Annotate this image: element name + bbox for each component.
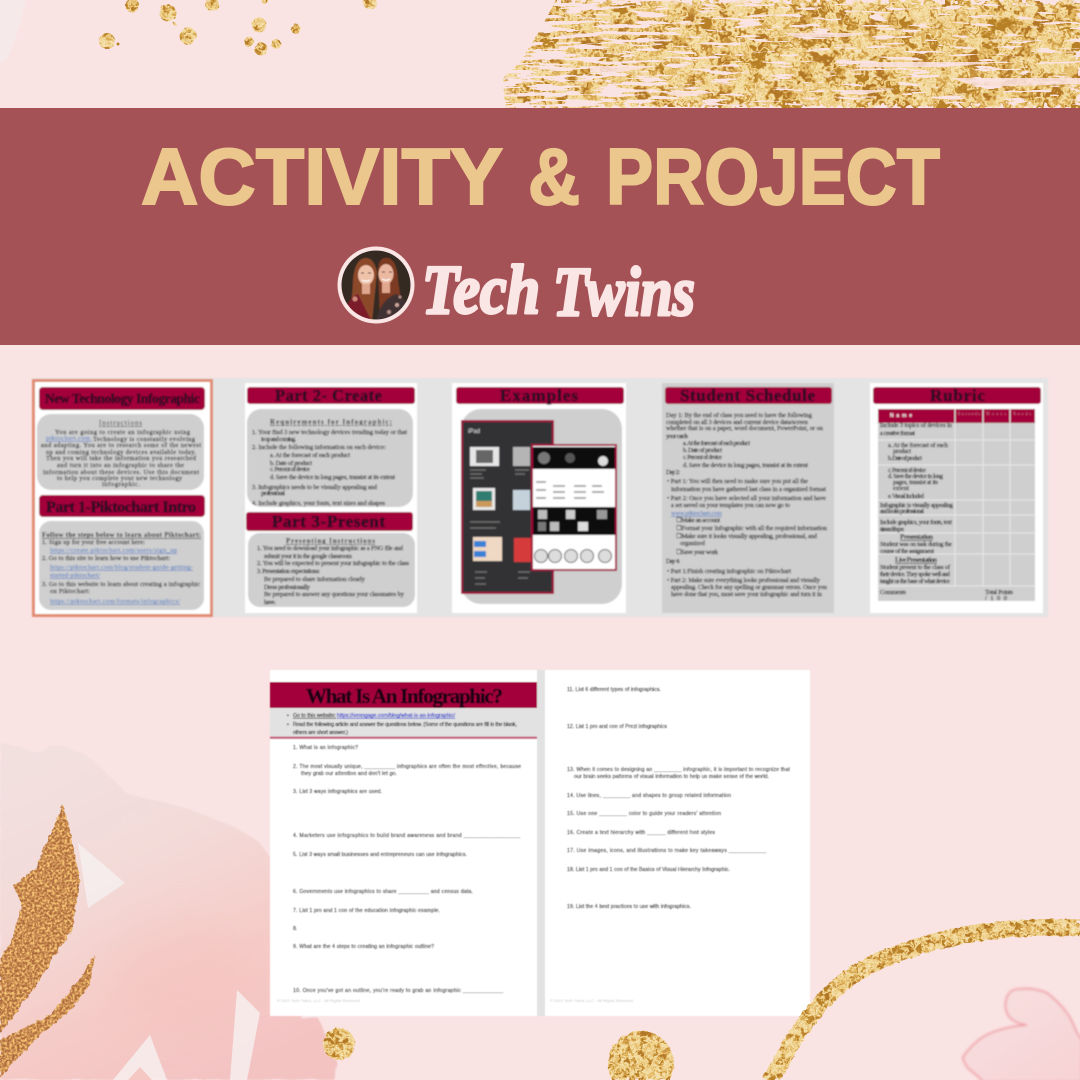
page 2: create and present: have. [264, 599, 276, 606]
page 5: rubric: Student was on task during the [880, 541, 952, 548]
page 2: create and present: professional [261, 490, 285, 497]
worksheet pages [270, 670, 810, 1016]
page 1: intro: Technology is constantly evolving [93, 436, 196, 443]
worksheet page 2: 13. When it comes to designing an _________ infographic, it is important to recognize that [567, 767, 791, 773]
worksheet page 1: 9. What are the 4 steps to creating an infographic outline? [293, 944, 434, 950]
title: PROJECT [606, 132, 940, 221]
worksheet page 2: 19. List the 4 best practices to use with infographics. [567, 904, 691, 910]
page 4: student schedule: whether that is on a paper, word document, PowerPoint, or on [666, 425, 824, 432]
worksheet page 1 [270, 670, 537, 1016]
page 1: intro: Instructions [99, 419, 142, 427]
page 5: rubric: course of the assignment [880, 548, 934, 555]
page 1: intro [34, 380, 212, 616]
page 1: intro: 3. Go to this website to learn about creating a infographic [42, 581, 200, 588]
page 4: student schedule: ☐Make sure it looks visually appealing, professional, and [676, 533, 818, 540]
page 2: create and present: 1. Your find 3 new technology devices trending today or that [252, 429, 407, 436]
worksheet page 1: Go to this website: [293, 713, 336, 719]
worksheet page 1: 2. The most visually unique, __________ infographics are often the most effective, because [293, 764, 521, 770]
copper brush stroke [0, 805, 95, 1077]
worksheet page 2: 18. List 1 pro and 1 con of the Basics of Visual Hierarchy Infographic. [567, 867, 730, 873]
gold brush stroke top right [503, 0, 1080, 108]
logo wordmark [422, 252, 695, 331]
page 5: rubric: Rubric [930, 386, 985, 405]
logo wordmark: Tech [422, 252, 540, 329]
worksheet page 1: 8. [293, 926, 297, 932]
page 4: student schedule: completed on all 3 devices and current device data/screen [666, 419, 809, 426]
worksheet page 1: 10. Once you've got an outline, you're ready to grab an infographic _____________ [293, 988, 503, 994]
page 4: student schedule: appealing. Check for any spelling or grammar errors. Once you [671, 584, 828, 591]
page 5: rubric: Name [890, 413, 912, 419]
page 5: rubric: product [893, 448, 911, 455]
page 5: rubric: a. At the forecast of each [888, 442, 949, 449]
page 5: rubric: taught us the base of what device [880, 578, 950, 585]
logo photo: Tech Twins [338, 246, 414, 324]
page 5: rubric: d. Save the device in long [888, 473, 944, 480]
page 5: rubric: Meets [986, 411, 1006, 416]
worksheet page 1: 7. List 1 pro and 1 con of the education infographic example. [293, 908, 440, 914]
page 5: rubric: /100 [985, 595, 1007, 602]
page 4: student schedule: b. Date of product [683, 447, 722, 454]
page 2: create and present: d. Save the device in long pages, transist at its extent [270, 474, 395, 481]
page 1: intro: and turn it into an infographic to share the [57, 462, 184, 469]
worksheet page 1: What Is An Infographic? [306, 684, 503, 708]
page 1: intro: and adapting. You are to research some of the newest [41, 442, 201, 449]
page 4: student schedule: • Part 1:Finish creating infographic on Piktochart [667, 568, 791, 575]
page 5: rubric [870, 383, 1043, 613]
page 2: create and present: 2. You will be expected to present your infographic to the class [257, 560, 410, 567]
page 5: rubric: Total Points [985, 589, 1014, 596]
page 2: create and present: submit your it in the google classroom [264, 553, 352, 560]
gold dot small [323, 1028, 355, 1060]
page 1: intro: on Piktochart: [50, 588, 90, 595]
pink watercolor bottom right [963, 989, 1080, 1080]
gold dot large [608, 1031, 674, 1080]
page 1: intro: Then you will take the information you researched [46, 455, 197, 462]
page 5: rubric: Include 3 topics of devices in [880, 422, 953, 429]
page 4: student schedule: ☐Make an account [676, 517, 720, 524]
page 2: create and present: Dress professionally [264, 584, 311, 591]
gold glitter dots top [99, 0, 377, 56]
worksheet page 2: 11. List 6 different types of infographics. [567, 687, 661, 693]
example infographic light [532, 445, 616, 570]
page 4: student schedule: organized [680, 540, 706, 547]
page 1: intro: information about these devices. Use this document [43, 469, 199, 476]
page 4: student schedule: • Part 2: Make sure everything looks professional and visually [667, 577, 821, 584]
title [141, 132, 940, 221]
page 2: create and present: 1. You need to download your infographic as a PNG file and [257, 545, 404, 552]
page 2: create and present: 3. Infographics needs to be visually appealing and [252, 484, 378, 491]
worksheet page 2: 16. Create a text hierarchy with ______ different font styles [567, 830, 715, 836]
title: & [528, 132, 580, 221]
logo wordmark: Twins [553, 254, 695, 331]
worksheet page 1: Read the following article and answer the questions below. (Some of the questions are fill in the blank, [293, 722, 517, 728]
page 1: intro: You are going to create an infographic using [55, 429, 191, 436]
page 2: create and present: b. Date of product [270, 460, 312, 467]
page 2: create and present: 3. Presentation expectations: [257, 568, 320, 575]
page 1: intro: 1. Sign up for your free account here: [42, 539, 145, 546]
page 4: student schedule [662, 383, 834, 613]
worksheet page 1: 6. Governments use infographics to share __________ and census data. [293, 889, 473, 895]
worksheet page 2: 15. Use one _________ color to guide your readers' attention [567, 811, 721, 817]
worksheet page 1: © 2021 Tech Twins, LLC - All Rights Reserved [277, 998, 360, 1003]
page 4: student schedule: ☐Format your Infographic with all the required information [676, 525, 828, 532]
page 4: student schedule: Student Schedule [680, 386, 815, 405]
worksheet page 1: • [287, 713, 289, 719]
page 2: create and present: Presenting Instructions [286, 537, 375, 545]
worksheet page 1: 5. List 3 ways small businesses and entrepreneurs can use infographics. [293, 852, 467, 858]
worksheet page 1: • [287, 722, 289, 728]
page 5: rubric: and looks professional [880, 508, 924, 515]
worksheet page 1: 3. List 3 ways infographics are used. [293, 789, 382, 795]
page 2: create and present: is up and coming. [261, 436, 296, 443]
page 4: student schedule: • Part 2: Once you have selected all your information and have [667, 495, 826, 502]
page 5: rubric: Exceeds [958, 411, 980, 416]
page 5: rubric: a creative format [880, 430, 915, 437]
worksheet page 1: they grab our attention and don't let go. [301, 771, 397, 777]
example infographic dark [462, 421, 553, 593]
page 4: student schedule: c. Percent of device [683, 454, 722, 461]
page 4: student schedule: Day 1: By the end of class you need to have the following [666, 412, 813, 419]
page 2: create and present: a. At the forecast of each product [270, 452, 350, 459]
page 4: student schedule: Day 2: [666, 469, 680, 476]
page 5: rubric: Include graphics, your fonts, text [880, 519, 952, 526]
page 2: create and present: 2. Include the following information on each device: [252, 444, 386, 451]
page 1: intro: Part 1-Piktochart Intro [46, 499, 196, 516]
worksheet page 2: our brain seeks patterns of visual information to help us make sense of the world. [574, 774, 769, 780]
page 1: intro: https://piktochart.com/blog/student-guide-getting- [50, 564, 193, 571]
page 5: rubric: b. Date of product [888, 455, 922, 462]
page 4: student schedule: • Part 1: You will then need to make sure you put all the [667, 478, 808, 485]
page 1: intro: https://create.piktochart.com/users/sign_up [50, 547, 177, 554]
page 2: create and present: Part 3-Present [272, 512, 385, 531]
page 4: student schedule: a. At the forecast of each product [683, 440, 750, 447]
worksheet page 2: 17. Use images, icons, and illustrations to make key takeaways ____________ [567, 848, 766, 854]
worksheet page 1: 4. Marketers use infographics to build brand awareness and brand __________________ [293, 833, 520, 839]
page 4: student schedule: ☐Save your work [676, 549, 719, 556]
page 1: intro: piktochart.com. [46, 435, 92, 442]
page 5: rubric: pages, transist at its [893, 479, 938, 486]
page 5: rubric: Presentation [900, 533, 933, 541]
page 4: student schedule: a set saved on your templates you can now go to [671, 502, 790, 509]
page 5: rubric: Live Presentation [895, 556, 937, 564]
page 4: student schedule: have done that you, must save your infographic and turn it in [671, 591, 823, 598]
page 4: student schedule: your cards [666, 433, 688, 440]
page 5: rubric: extent [893, 485, 909, 492]
watercolor flower bottom left [0, 743, 337, 1080]
gold curve [770, 927, 1080, 1080]
worksheet page 2: 14. Use lines, _________ and shapes to group related information [567, 793, 731, 799]
worksheet page 1: 1. What is an infographic? [293, 745, 358, 751]
corner watercolor wash [0, 0, 26, 64]
page 2: create and present: c. Percent of device [270, 466, 310, 473]
page 5: rubric: Comments [880, 589, 906, 596]
page 1: intro: https://piktochart.com/formats/infographics/ [50, 598, 180, 605]
page 2: create and present: Be prepared to answer any questions your classmates by [264, 591, 405, 598]
page 3: examples [452, 383, 626, 613]
page 4: student schedule: information you have gathered last class in a organized format [671, 486, 826, 493]
example infographic dark: iPad [468, 429, 480, 435]
page 4: student schedule: Day 4: [666, 558, 680, 565]
page 5: rubric: their device. They spoke well and [880, 571, 951, 578]
page 5: rubric: Infographic is visually appealing [880, 502, 954, 509]
page 1: intro: Follow the steps below to learn about Piktochart: [42, 531, 201, 539]
worksheet page 2: © 2021 Tech Twins, LLC - All Rights Reserved [550, 998, 633, 1003]
page 5: rubric: e. Visual Included [888, 493, 925, 500]
page 2: create and present: Be prepared to share information clearly [264, 576, 366, 583]
page 1: intro: infographic. [102, 481, 140, 488]
page 1: intro: New Technology Infographic [45, 391, 200, 406]
page 5: rubric: Student present to the class of [880, 564, 951, 571]
page 3: examples: Examples [500, 386, 578, 405]
page 2: create and present: 4. Include graphics, your fonts, text sizes and shapes [252, 500, 386, 507]
page 1: intro: up and coming technology devices available today. [46, 449, 196, 456]
worksheet page 2: 12. List 1 pro and con of Prezi infographics [567, 724, 667, 730]
title banner [0, 108, 1080, 345]
worksheet page 2 [545, 670, 810, 1016]
document strip [32, 378, 1048, 617]
page 1: intro: 2. Go to this site to learn how to use Piktochart: [42, 555, 170, 562]
worksheet page 1: others are short answer.) [293, 730, 348, 736]
page 1: intro: started-piktochart/ [50, 572, 100, 579]
page 4: student schedule: www.piktochart.com [671, 510, 722, 517]
page 5: rubric: c. Percent of device [888, 467, 926, 474]
page 4: student schedule: d. Save the device in long pages, transist at its extent [683, 462, 808, 469]
page 2: create and present: Requirements for Infographic: [270, 418, 392, 426]
page 1: intro: to help you complete your new technology [57, 475, 183, 482]
page 5: rubric: sizes and shapes [880, 526, 904, 533]
page 2: create and present [245, 383, 417, 613]
page 2: create and present: Part 2- Create [275, 386, 382, 405]
worksheet page 1: https://venngage.com/blog/what-is-an-infographic/ [337, 713, 456, 719]
page 5: rubric: Needs [1013, 411, 1031, 416]
title: ACTIVITY [141, 132, 503, 221]
